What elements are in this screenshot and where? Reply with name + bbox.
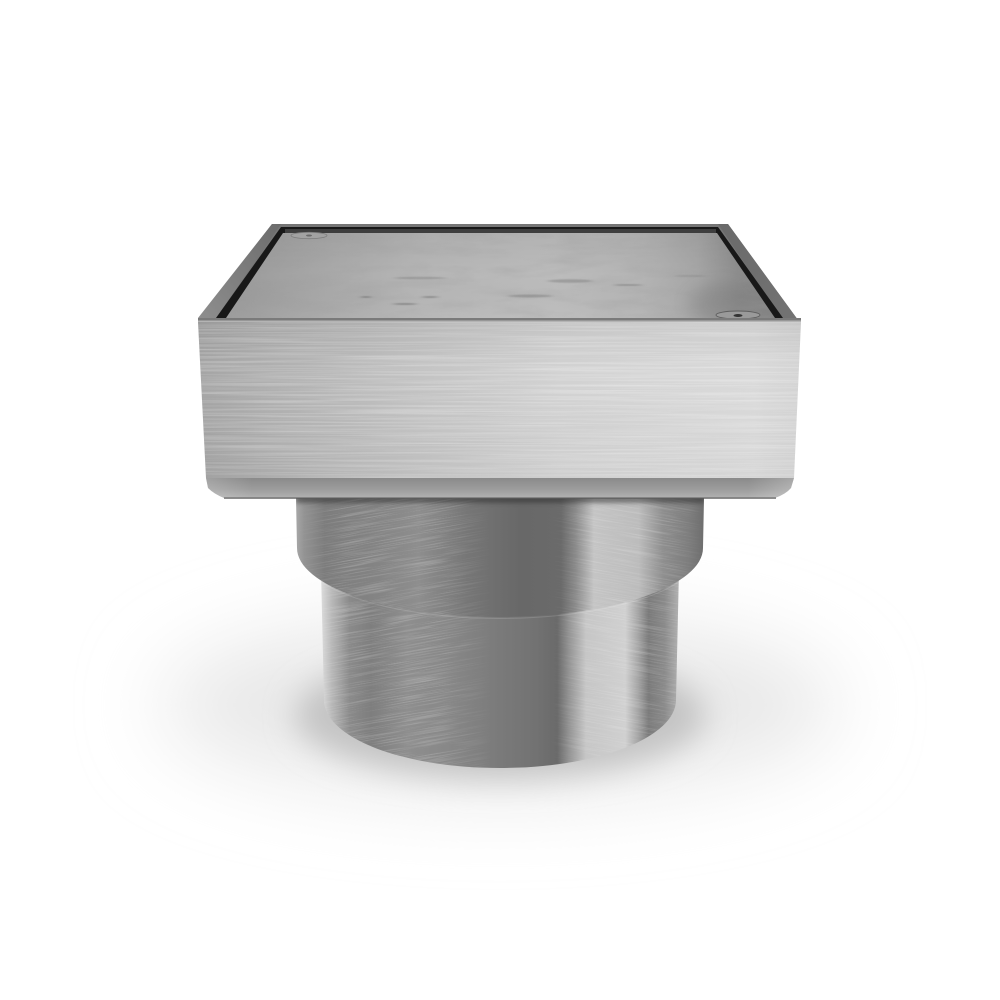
- upper cylinder: [296, 498, 704, 619]
- right rim bevel: [718, 224, 798, 320]
- square head: [198, 224, 802, 499]
- product illustration: [170, 224, 830, 811]
- ground shadow: [160, 615, 840, 795]
- front top edge: [198, 318, 801, 320]
- bottom chamfer: [206, 478, 794, 499]
- plate smudges: [361, 275, 706, 305]
- left rim bevel: [198, 224, 281, 318]
- screw: back left: [291, 232, 327, 239]
- front brushed face: [198, 322, 802, 478]
- screw: front right: [716, 311, 760, 319]
- cover plate: [225, 230, 777, 325]
- top channel inner wall: [285, 229, 716, 233]
- lower cylinder: [321, 580, 679, 768]
- black channel: [216, 227, 783, 318]
- top rim: [198, 224, 798, 320]
